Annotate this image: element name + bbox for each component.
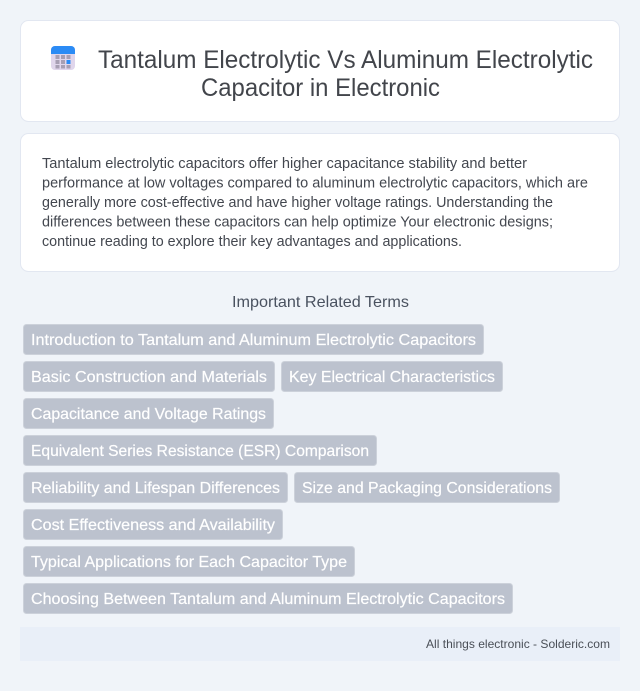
tag: key electrical characteristics [282, 362, 502, 392]
tag: capacitance and voltage: Capacitance and Voltage Ratings [31, 406, 266, 423]
tag: choosing between: Choosing Between Tantalum and Aluminum Electrolytic Capacitors [31, 591, 505, 608]
tag: ESR comparison: Equivalent Series Resistance (ESR) Comparison [31, 443, 369, 460]
tag: reliability and lifespan [24, 472, 288, 502]
panel: introduction text [20, 134, 620, 272]
tag: cost effectiveness [24, 510, 282, 540]
panel: introduction text: generally more cost-effective and have higher voltage ratings. Understanding the [42, 195, 553, 211]
footer: All things electronic - Solderic.com [426, 637, 610, 651]
footer [20, 627, 620, 661]
panel: introduction text: performance at low voltages compared to aluminum electrolytic capacitors, which are [42, 176, 588, 192]
panel: introduction text: Tantalum electrolytic capacitors offer higher capacitance stability and better [42, 156, 527, 172]
tag: size and packaging: Size and Packaging Considerations [302, 480, 552, 497]
tag: typical applications [24, 546, 354, 576]
tag: introduction: Introduction to Tantalum and Aluminum Electrolytic Capacitors [31, 332, 476, 349]
panel: title card [20, 20, 620, 122]
tag: cost effectiveness: Cost Effectiveness and Availability [31, 517, 275, 534]
tag: reliability and lifespan: Reliability and Lifespan Differences [31, 480, 280, 497]
tag: size and packaging [294, 472, 560, 502]
title: Capacitor in Electronic [201, 74, 440, 102]
icon: calendar grid [51, 46, 75, 70]
panel: introduction text: differences between these capacitors can help optimize Your electronic designs; [42, 214, 553, 230]
tag: basic construction: Basic Construction and Materials [31, 369, 267, 386]
tag: choosing between [24, 584, 512, 614]
title [98, 46, 593, 102]
tag: introduction [24, 324, 484, 354]
tag: key electrical characteristics: Key Electrical Characteristics [289, 369, 495, 386]
tag: basic construction [24, 362, 274, 392]
title: Tantalum Electrolytic Vs Aluminum Electrolytic [98, 46, 593, 74]
term tags [24, 324, 560, 614]
tag: capacitance and voltage [24, 398, 274, 428]
panel: introduction text: continue reading to explore their key advantages and applications. [42, 234, 462, 250]
heading: important related terms: Important Related Terms [232, 294, 409, 311]
tag: typical applications: Typical Applications for Each Capacitor Type [31, 554, 347, 571]
tag: ESR comparison [24, 436, 376, 466]
